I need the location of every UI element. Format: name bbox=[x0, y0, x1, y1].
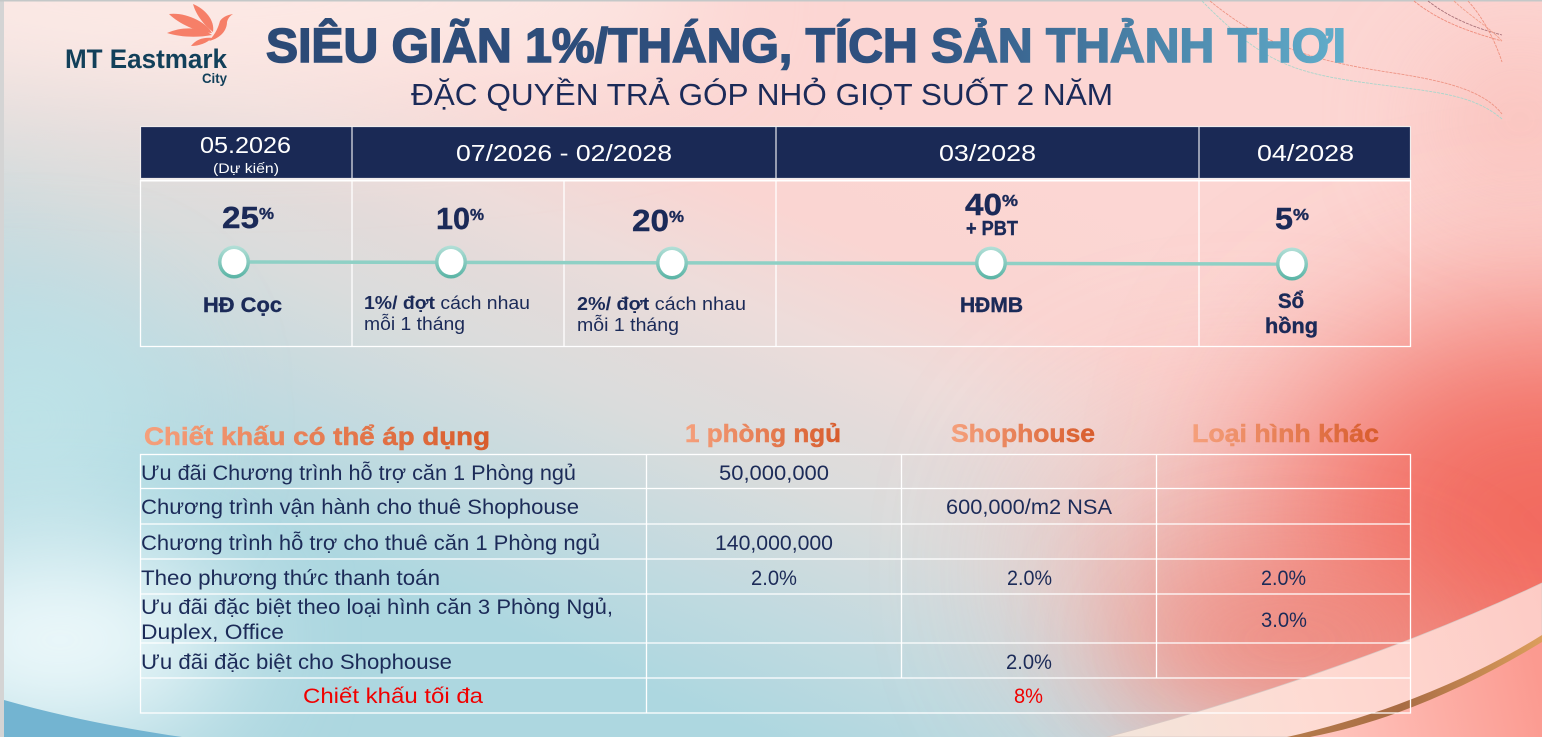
row: special unit types: Ưu đãi đặc biệt theo loại hình căn 3 Phòng Ngủ, bbox=[141, 596, 613, 619]
title: SIÊU GIÃN 1%/THÁNG, TÍCH SẢN THẢNH THƠI bbox=[266, 18, 1346, 73]
timeline header row bbox=[140, 126, 1410, 178]
row: shophouse rental: Chương trình vận hành cho thuê Shophouse bbox=[141, 496, 579, 519]
step: 5% bbox=[1265, 201, 1318, 338]
date 03/2028: 03/2028 bbox=[939, 140, 1036, 166]
row: payment method: 2.0% bbox=[751, 567, 797, 590]
row: shophouse special bbox=[141, 651, 1052, 674]
step: 40% + PBT: 40 bbox=[965, 187, 1002, 222]
date 05.2026: 05.2026 bbox=[200, 132, 291, 158]
table column headings: 1 phòng ngủ bbox=[685, 420, 841, 448]
step: 5%: Sổ bbox=[1278, 290, 1304, 313]
row: 1 bedroom rental bbox=[141, 532, 833, 555]
table column headings bbox=[144, 420, 1379, 451]
timeline body grid bbox=[140, 180, 1411, 346]
icon: bird petals bbox=[167, 4, 233, 46]
row: shophouse rental: 600,000/m2 NSA bbox=[946, 496, 1112, 519]
step: 25% deposit: 25 bbox=[222, 200, 259, 235]
date range: 07/2026 - 02/2028 bbox=[456, 140, 672, 166]
date 04/2028: 04/2028 bbox=[1257, 140, 1354, 166]
row: special unit types: 3.0% bbox=[1261, 609, 1307, 632]
note dự kiến: (Dự kiến) bbox=[213, 160, 279, 176]
step: 20%: mỗi 1 tháng bbox=[577, 314, 679, 335]
step: 20%: 2%/ đợt cách nhau bbox=[577, 293, 746, 314]
step: 5%: hồng bbox=[1265, 315, 1318, 338]
step: 25% deposit: % bbox=[259, 206, 274, 223]
step: 20% bbox=[577, 203, 746, 335]
row: special unit types: Duplex, Office bbox=[141, 621, 284, 644]
table grid bbox=[140, 454, 1411, 713]
row: special unit types bbox=[141, 596, 1307, 644]
row: 1 bedroom rental: Chương trình hỗ trợ cho thuê căn 1 Phòng ngủ bbox=[141, 532, 600, 555]
step: 10%: 1%/ đợt cách nhau bbox=[364, 292, 530, 313]
step: 5%: % bbox=[1293, 207, 1309, 224]
logo: MT Eastmark City bbox=[65, 4, 233, 86]
table column headings: Shophouse bbox=[951, 420, 1095, 448]
step: 5%: 5 bbox=[1275, 201, 1293, 236]
step: 40% + PBT: + PBT bbox=[966, 218, 1018, 240]
brand name: MT Eastmark bbox=[65, 44, 228, 74]
step: 40% + PBT: HĐMB bbox=[960, 294, 1023, 317]
step: 10%: 10 bbox=[436, 201, 470, 236]
row: maximum discount: Chiết khấu tối đa bbox=[303, 685, 483, 708]
step: 20%: 20 bbox=[632, 203, 669, 238]
city label: City bbox=[202, 70, 227, 86]
row: 1 bedroom support bbox=[141, 462, 829, 485]
row: maximum discount: 8% bbox=[1014, 685, 1043, 708]
row: shophouse special: 2.0% bbox=[1006, 651, 1052, 674]
table column headings: Loại hình khác bbox=[1192, 420, 1379, 448]
table column headings: Chiết khấu có thể áp dụng bbox=[144, 423, 490, 451]
row: payment method: 2.0% bbox=[1007, 567, 1052, 590]
subtitle: ĐẶC QUYỀN TRẢ GÓP NHỎ GIỌT SUỐT 2 NĂM bbox=[411, 76, 1113, 112]
timeline connector bbox=[234, 262, 1292, 264]
row: maximum discount bbox=[303, 685, 1043, 708]
row: 1 bedroom rental: 140,000,000 bbox=[715, 532, 833, 555]
panel: payment timeline bbox=[140, 126, 1411, 346]
step: 40% + PBT bbox=[960, 187, 1023, 317]
step: 40% + PBT: % bbox=[1002, 193, 1018, 210]
row: shophouse special: Ưu đãi đặc biệt cho Shophouse bbox=[141, 651, 452, 674]
panel: discount table bbox=[140, 420, 1411, 713]
row: 1 bedroom support: Ưu đãi Chương trình hỗ trợ căn 1 Phòng ngủ bbox=[141, 462, 576, 485]
row: payment method: 2.0% bbox=[1261, 567, 1306, 590]
step: 10%: % bbox=[470, 207, 484, 224]
row: shophouse rental bbox=[141, 496, 1112, 519]
step: 10%: mỗi 1 tháng bbox=[364, 313, 465, 334]
row: payment method: Theo phương thức thanh toán bbox=[141, 567, 440, 590]
step: 25% deposit bbox=[203, 200, 282, 317]
row: 1 bedroom support: 50,000,000 bbox=[719, 462, 829, 485]
step: 10% bbox=[364, 201, 530, 334]
row: payment method bbox=[141, 567, 1306, 590]
step: 25% deposit: HĐ Cọc bbox=[203, 294, 282, 317]
step: 20%: % bbox=[669, 209, 684, 226]
